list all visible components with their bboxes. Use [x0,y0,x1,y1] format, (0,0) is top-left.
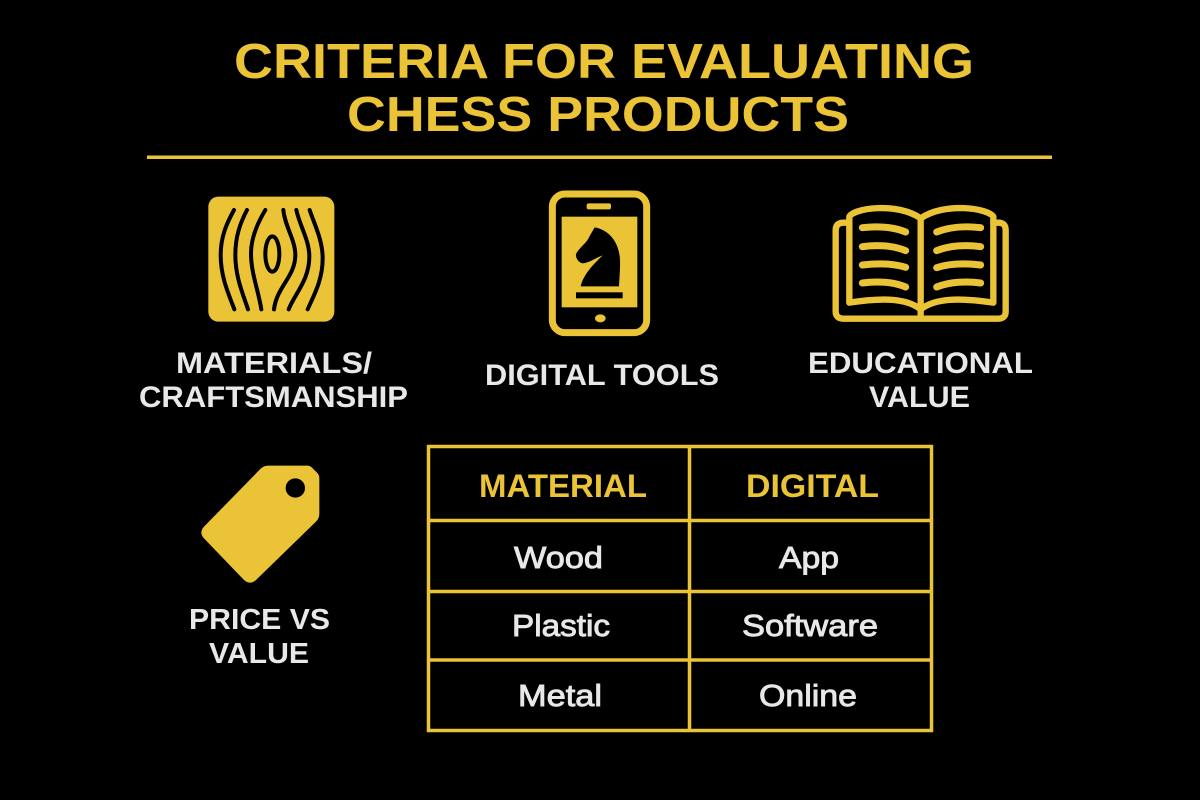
panel: digital tools [485,194,719,392]
panel: educational value [808,208,1033,414]
panel: price vs value [189,466,330,670]
table header: DIGITAL [746,468,879,504]
table row: plastic, software: Plastic [512,608,610,643]
title: CRITERIA FOR EVALUATING [234,35,974,89]
panel: materials and craftsmanship [139,197,408,414]
table row: plastic, software: Software [742,608,878,643]
label: educational value [808,347,1033,414]
label: educational value: EDUCATIONAL [808,347,1033,380]
label: materials/craftsmanship: CRAFTSMANSHIP [139,381,408,414]
label: materials/craftsmanship [139,347,408,414]
title [234,35,974,142]
table row: wood, app [514,540,839,575]
title: CHESS PRODUCTS [347,88,849,142]
label: price vs value: PRICE VS [189,604,330,636]
icon: price tag [201,466,319,583]
icon: open book [836,208,1006,319]
table row: plastic, software [512,608,878,643]
table row: metal, online: Metal [518,678,602,713]
label: digital tools: DIGITAL TOOLS [485,359,719,392]
table header [479,468,879,504]
table row: wood, app: App [779,540,839,575]
icon: phone with chess knight [552,194,647,333]
table row: metal, online [518,678,857,713]
table header: MATERIAL [479,468,647,504]
label: price vs value [189,604,330,670]
table: material vs digital [428,446,932,730]
table row: wood, app: Wood [514,540,603,575]
icon: wood grain [208,197,334,322]
table row: metal, online: Online [759,678,857,713]
label: materials/craftsmanship: MATERIALS/ [176,347,373,380]
label: educational value: VALUE [869,381,970,414]
label: price vs value: VALUE [209,638,309,670]
